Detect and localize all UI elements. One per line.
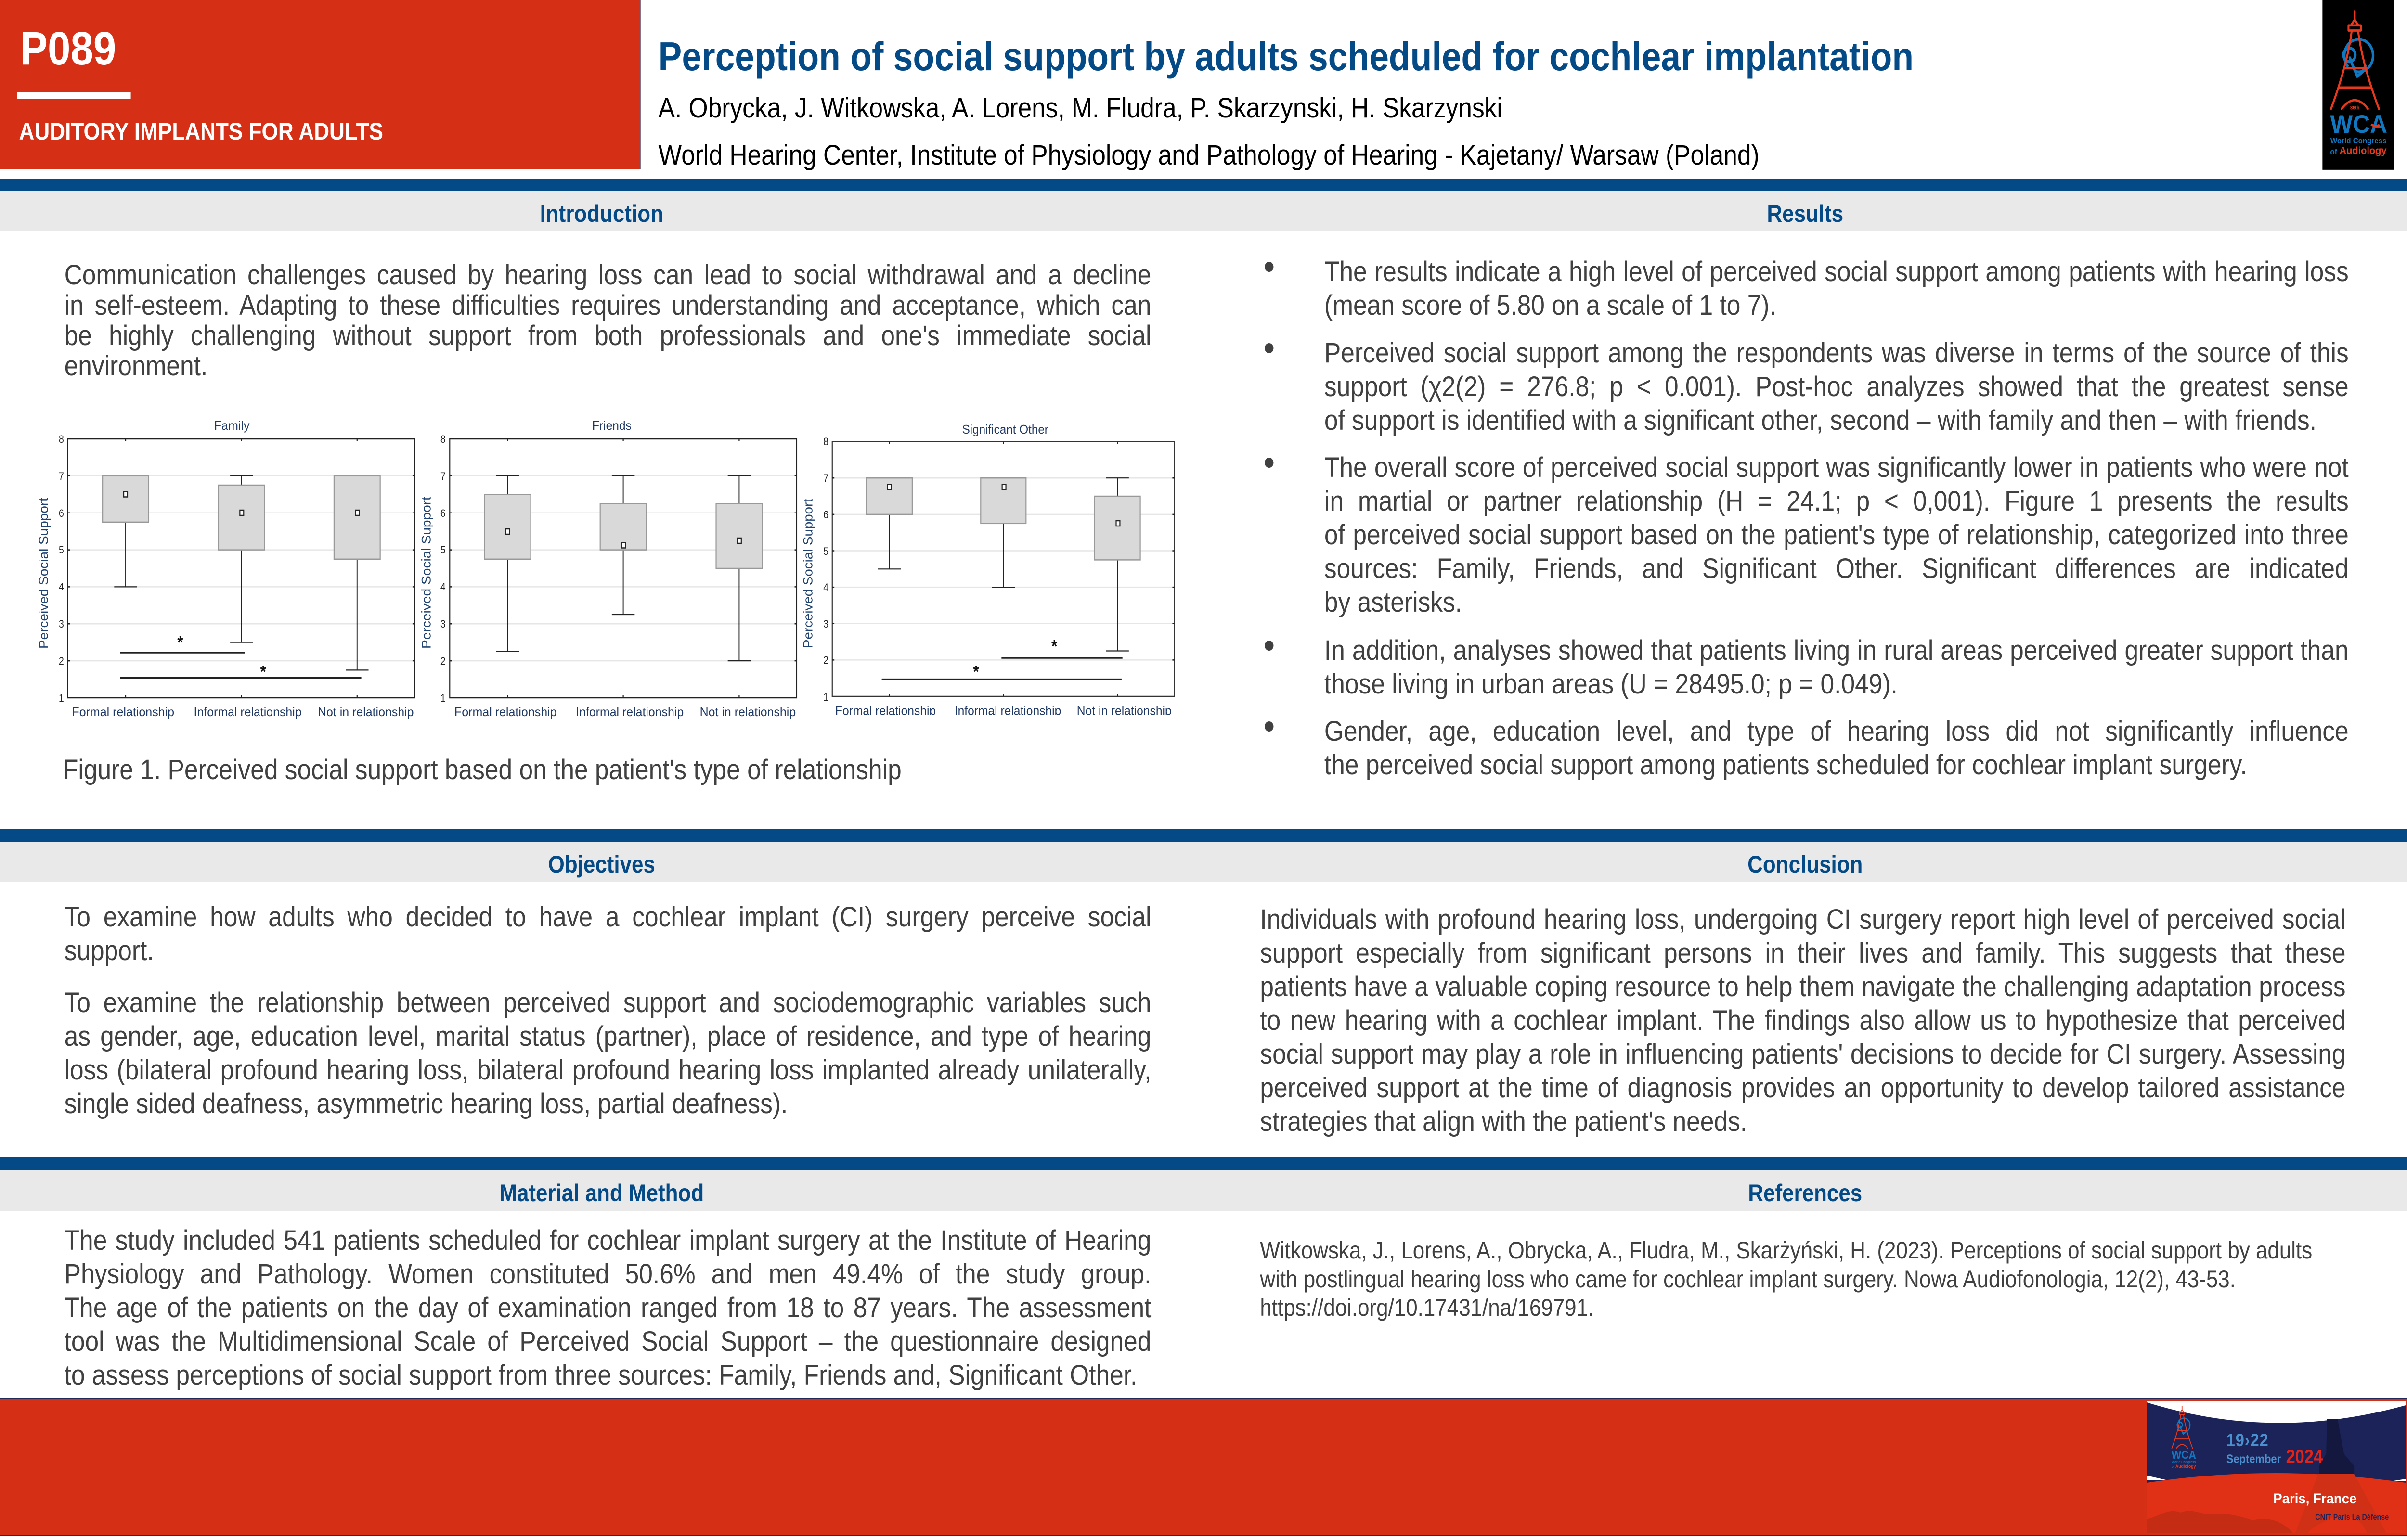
chart: Family: Informal relationship xyxy=(194,705,302,719)
chart: Significant Other: Perceived Social Support xyxy=(802,498,815,648)
chart: Significant Other xyxy=(802,422,1180,721)
text block: introduction: Communication challenges caused by hearing loss can lead to social withdrawal and a decline xyxy=(65,259,1151,291)
text block: conclusion: Individuals with profound hearing loss, undergoing CI surgery report high level of perceived social xyxy=(1260,904,2346,935)
icon: congress banner: 19›22 xyxy=(2226,1430,2268,1450)
chart: Family: * xyxy=(260,662,266,681)
icon: congress banner: Audiology xyxy=(2175,1464,2196,1469)
figure caption: Figure 1. Perceived social support based on the patient's type of relationship xyxy=(63,754,902,785)
chart: Family: Family xyxy=(214,418,250,433)
chart: Significant Other: 3 xyxy=(823,618,828,630)
poster number: P089 xyxy=(20,22,116,75)
chart: Friends: 4 xyxy=(440,581,446,593)
chart: Significant Other: 8 xyxy=(823,436,828,448)
icon: congress banner: World Congress xyxy=(2172,1460,2196,1464)
chart: Friends: 6 xyxy=(440,507,446,519)
chart: Significant Other: Significant Other xyxy=(962,422,1048,436)
result item 5: the perceived social support among patients scheduled for cochlear implant surgery. xyxy=(1324,749,2247,781)
chart: Significant Other: 7 xyxy=(823,472,828,484)
heading: material and method: Material and Method xyxy=(499,1180,704,1206)
text block: material and method xyxy=(65,1224,1151,1392)
text block: conclusion: to new hearing with a cochlear implant. The findings also allow us to hypothesize that perceived xyxy=(1260,1005,2346,1036)
text block: conclusion xyxy=(1260,904,2346,1137)
result item 5 xyxy=(1265,716,2349,781)
chart: Friends: 1 xyxy=(440,692,446,704)
chart: Significant Other: Not in relationship xyxy=(1077,704,1172,718)
icon: congress banner: Paris, France xyxy=(2273,1491,2356,1507)
chart: Significant Other: Formal relationship xyxy=(835,704,936,718)
poster title: Perception of social support by adults scheduled for cochlear implantation xyxy=(659,34,1914,79)
result item 4: those living in urban areas (U = 28495.0; p = 0.049). xyxy=(1324,668,1898,700)
chart: Friends xyxy=(420,418,797,719)
panel: material and method xyxy=(0,1170,1204,1391)
header panel: session tag xyxy=(0,0,641,169)
icon: bullet xyxy=(1265,641,1273,651)
chart: Significant Other: Informal relationship xyxy=(955,704,1061,718)
objective paragraph 2: as gender, age, education level, marital status (partner), place of residence, and type of hearing xyxy=(65,1021,1151,1052)
footer band xyxy=(0,1398,2407,1536)
objective paragraph 1: To examine how adults who decided to have a cochlear implant (CI) surgery perceive social xyxy=(65,901,1151,933)
result item 4 xyxy=(1265,635,2349,700)
chart: Significant Other: 4 xyxy=(823,581,828,593)
icon: WCA congress logo xyxy=(2322,0,2394,170)
icon: congress banner: of xyxy=(2172,1464,2175,1469)
panel: introduction xyxy=(0,191,1204,785)
chart: Friends: 2 xyxy=(440,655,446,667)
authors: A. Obrycka, J. Witkowska, A. Lorens, M. Fludra, P. Skarzynski, H. Skarzynski xyxy=(659,92,1502,124)
heading: references: References xyxy=(1748,1180,1862,1206)
chart: Family: 2 xyxy=(59,655,64,667)
text block: reference entry: Witkowska, J., Lorens, A., Obrycka, A., Fludra, M., Skarżyński, H. (2023). Perceptions of social support by adults xyxy=(1260,1237,2312,1264)
text block: conclusion: strategies that align with the patient's needs. xyxy=(1260,1106,1747,1137)
icon: WCA congress logo: of xyxy=(2330,147,2337,156)
heading: conclusion xyxy=(1204,842,2407,882)
chart: Significant Other: 2 xyxy=(823,654,828,666)
chart: Friends: Friends xyxy=(592,418,632,433)
icon: WCA congress logo: WCA xyxy=(2330,110,2387,139)
chart: Friends: 3 xyxy=(440,618,446,630)
text block: conclusion: support especially from significant persons in their lives and family. This suggests that these xyxy=(1260,937,2346,969)
chart: Family: 3 xyxy=(59,618,64,630)
affiliation: World Hearing Center, Institute of Physiology and Pathology of Hearing - Kajetany/ Warsaw (Poland) xyxy=(659,140,1760,171)
result item 1 xyxy=(1265,256,2349,321)
chart: Family: 5 xyxy=(59,544,64,556)
chart: Family: 1 xyxy=(59,692,64,704)
heading: introduction xyxy=(0,191,1204,231)
text block: reference entry xyxy=(1260,1236,2312,1322)
icon: WCA congress logo: World Congress xyxy=(2330,136,2387,145)
text block: material and method: The age of the patients on the day of examination ranged from 18 to 87 years. The assessment xyxy=(65,1292,1151,1323)
panel: conclusion xyxy=(1204,842,2407,1137)
icon: congress banner xyxy=(2147,1401,2406,1533)
text block: conclusion: social support may play a role in influencing patients' decisions to decide for CI surgery. Assessing xyxy=(1260,1039,2346,1070)
chart: Family: 7 xyxy=(59,470,64,482)
objective paragraph 1: support. xyxy=(65,935,154,966)
text block: material and method: to assess perceptions of social support from three sources: Family, Friends and, Significant Other. xyxy=(65,1360,1137,1391)
panel: results xyxy=(1204,191,2407,781)
result item 2: support (χ2(2) = 276.8; p < 0.001). Post-hoc analyzes showed that the greatest sense xyxy=(1324,371,2349,402)
text block: material and method: The study included 541 patients scheduled for cochlear implant surgery at the Institute of Hearing xyxy=(65,1225,1151,1256)
icon: congress banner: WCA xyxy=(2172,1449,2196,1461)
result item 5: Gender, age, education level, and type of hearing loss did not significantly influence xyxy=(1324,716,2349,747)
heading: objectives xyxy=(0,842,1204,882)
text block: conclusion: perceived support at the time of diagnosis provides an opportunity to develop tailored assistance xyxy=(1260,1072,2346,1104)
chart: Friends: 8 xyxy=(440,433,446,445)
chart: Significant Other: * xyxy=(1051,636,1057,656)
chart: Friends: 5 xyxy=(440,544,446,556)
chart: Family: * xyxy=(177,632,183,652)
text block: reference entry: https://doi.org/10.17431/na/169791. xyxy=(1260,1294,1594,1321)
chart: Family: 4 xyxy=(59,581,64,593)
icon: congress banner: September xyxy=(2226,1452,2281,1466)
chart: Friends: 7 xyxy=(440,470,446,482)
icon: bullet xyxy=(1265,343,1273,353)
objective paragraph 2: To examine the relationship between perceived support and sociodemographic variables such xyxy=(65,987,1151,1018)
chart: Friends: Not in relationship xyxy=(700,705,796,719)
chart: Friends: Perceived Social Support xyxy=(420,496,434,649)
panel: references xyxy=(1204,1170,2407,1397)
chart: Significant Other: * xyxy=(973,662,979,681)
icon: bullet xyxy=(1265,458,1273,468)
result item 3: in martial or partner relationship (H = 24.1; p < 0,001). Figure 1 presents the results xyxy=(1324,486,2349,517)
heading: results xyxy=(1204,191,2407,231)
chart: Family: Perceived Social Support xyxy=(37,497,51,649)
heading: results: Results xyxy=(1767,200,1843,227)
text block: material and method: Physiology and Pathology. Women constituted 50.6% and men 49.4% of the study group. xyxy=(65,1258,1151,1290)
icon: WCA congress logo: Audiology xyxy=(2340,145,2387,156)
chart: Family: 6 xyxy=(59,507,64,519)
chart: Friends: Formal relationship xyxy=(454,705,557,719)
text block: reference entry: with postlingual hearing loss who came for cochlear implant surgery. Nowa Audiofonologia, 12(2), 43-53. xyxy=(1260,1266,2236,1293)
result item 2 xyxy=(1265,337,2349,436)
heading: introduction: Introduction xyxy=(540,200,663,227)
icon: bullet xyxy=(1265,721,1273,732)
objective paragraph 2 xyxy=(65,987,1151,1119)
chart: Family: Formal relationship xyxy=(72,705,174,719)
result item 4: In addition, analyses showed that patients living in rural areas perceived greater support than xyxy=(1324,635,2349,666)
text block: conclusion: patients have a valuable coping resource to help them navigate the challenging adaptation process xyxy=(1260,971,2346,1002)
result item 3: of perceived social support based on the patient's type of relationship, categorized into three xyxy=(1324,519,2349,551)
chart: Significant Other: 1 xyxy=(823,691,828,703)
heading: conclusion: Conclusion xyxy=(1747,851,1863,878)
heading: references xyxy=(1204,1170,2407,1211)
heading: material and method xyxy=(0,1170,1204,1211)
text block: introduction: be highly challenging without support from both professionals and one's immediate social xyxy=(65,320,1151,351)
objective paragraph 2: loss (bilateral profound hearing loss, bilateral profound hearing loss implanted already unilaterally, xyxy=(65,1054,1151,1086)
panel: objectives xyxy=(0,842,1204,1119)
session name: AUDITORY IMPLANTS FOR ADULTS xyxy=(19,118,383,145)
result item 2: of support is identified with a significant other, second – with family and then – with friends. xyxy=(1324,405,2316,436)
chart: Family: Not in relationship xyxy=(318,705,414,719)
text block: introduction: in self-esteem. Adapting to these difficulties requires understanding and acceptance, which can xyxy=(65,290,1151,321)
text block: introduction xyxy=(65,259,1151,382)
objective paragraph 1 xyxy=(65,901,1151,966)
result item 3: sources: Family, Friends, and Significant Other. Significant differences are indicated xyxy=(1324,553,2349,584)
chart: Significant Other: 6 xyxy=(823,509,828,521)
result item 3: The overall score of perceived social support was significantly lower in patients who were not xyxy=(1324,452,2349,483)
chart: Family xyxy=(37,418,414,719)
result item 2: Perceived social support among the respondents was diverse in terms of the source of this xyxy=(1324,337,2349,369)
chart: Friends: Informal relationship xyxy=(576,705,684,719)
icon: bullet xyxy=(1265,262,1273,272)
chart group: perceived social support box plots xyxy=(37,418,1175,719)
icon: congress banner: 2024 xyxy=(2286,1446,2323,1467)
text block: material and method: tool was the Multidimensional Scale of Perceived Social Support – the questionnaire designed xyxy=(65,1326,1151,1357)
result item 3 xyxy=(1265,452,2349,618)
result item 1: The results indicate a high level of perceived social support among patients with hearing loss xyxy=(1324,256,2349,287)
result item 1: (mean score of 5.80 on a scale of 1 to 7). xyxy=(1324,290,1776,321)
icon: congress banner: CNIT Paris La Défense xyxy=(2315,1513,2389,1522)
chart: Significant Other: 5 xyxy=(823,545,828,557)
chart: Family: 8 xyxy=(59,433,64,445)
icon: WCA congress logo: 36th xyxy=(2350,105,2359,111)
objective paragraph 2: single sided deafness, asymmetric hearing loss, partial deafness). xyxy=(65,1088,788,1119)
result item 3: by asterisks. xyxy=(1324,587,1462,618)
heading: objectives: Objectives xyxy=(548,851,655,878)
white rule under poster number xyxy=(17,92,131,99)
text block: introduction: environment. xyxy=(65,350,207,382)
